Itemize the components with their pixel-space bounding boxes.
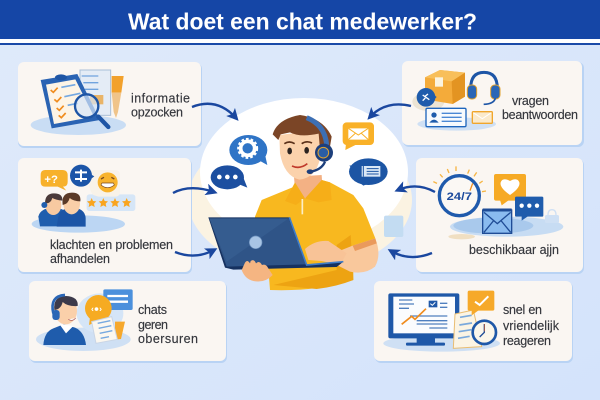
label: afhandelen [50, 252, 110, 266]
agent left hand [242, 260, 273, 282]
arrow: informatie opzoeken to agent [192, 104, 236, 118]
icon: monitor, document and clock [383, 291, 500, 352]
label: beantwoorden [502, 108, 578, 122]
arrow: beschikbaar to agent bottom [391, 251, 432, 257]
arrow: vragen beantwoorden to agent [370, 104, 411, 117]
label [131, 92, 190, 120]
icon: agent with chat bubbles [36, 289, 133, 351]
agent hair [273, 115, 332, 157]
icon: 24/7 clock, envelope and bubbles [433, 166, 563, 239]
arrow: klachten to agent bottom [175, 250, 214, 256]
pale document icon [384, 216, 403, 237]
speech bubble: gear [229, 135, 267, 165]
label [502, 94, 578, 122]
agent shirt [255, 180, 375, 290]
arrow: beschikbaar to agent top [398, 186, 435, 192]
agent eyes and smile [284, 142, 312, 167]
speech bubble: mail [343, 122, 374, 150]
label: chats [138, 303, 167, 317]
agent neck [294, 175, 322, 199]
label: vragen [512, 94, 549, 108]
label: klachten en problemen [50, 238, 173, 252]
panel: klachten en problemen afhandelen [18, 158, 192, 274]
central agent illustration [208, 115, 403, 290]
label: geren [138, 318, 168, 332]
panel: chats geren obersuren [29, 281, 227, 363]
label: opzocken [131, 106, 183, 120]
panel: vragen beantwoorden [402, 61, 584, 147]
speech bubble: dots [211, 165, 247, 189]
icon: customers, emoji and stars [32, 165, 135, 233]
icon: 24/7 clock, envelope and bubbles: 24/7 [447, 191, 472, 203]
icon: customers, emoji and stars: +? [44, 174, 58, 186]
icon: parcel, headset and contact card [412, 70, 500, 131]
headset [307, 118, 333, 174]
header banner [0, 0, 600, 45]
label: snel en [503, 303, 542, 317]
title: Wat doet een chat medewerker? [128, 8, 477, 34]
speech bubble: list [349, 158, 388, 186]
label [50, 238, 173, 266]
label: vriendelijk [503, 319, 560, 333]
arrow: klachten to agent top [173, 188, 214, 193]
agent right arm [330, 238, 378, 273]
agent face [279, 130, 320, 180]
panel: snel en vriendelijk reageren [374, 281, 573, 363]
icon: clipboard with magnifier [31, 70, 126, 135]
icon: agent with chat bubbles: ‹●› [91, 303, 102, 313]
label: obersuren [138, 332, 198, 346]
label: beschikbaar ajjn [469, 243, 559, 257]
shirt collar [285, 180, 332, 205]
label [503, 303, 560, 348]
panel: beschikbaar zijn [416, 158, 584, 274]
background glow behind the agent [188, 98, 412, 272]
label [138, 303, 198, 346]
label: informatie [131, 92, 190, 106]
panel: informatie opzoeken [18, 62, 202, 148]
agent typing hand [305, 241, 347, 265]
shirt shadow [273, 235, 353, 289]
label: reageren [503, 334, 551, 348]
laptop [208, 217, 343, 270]
